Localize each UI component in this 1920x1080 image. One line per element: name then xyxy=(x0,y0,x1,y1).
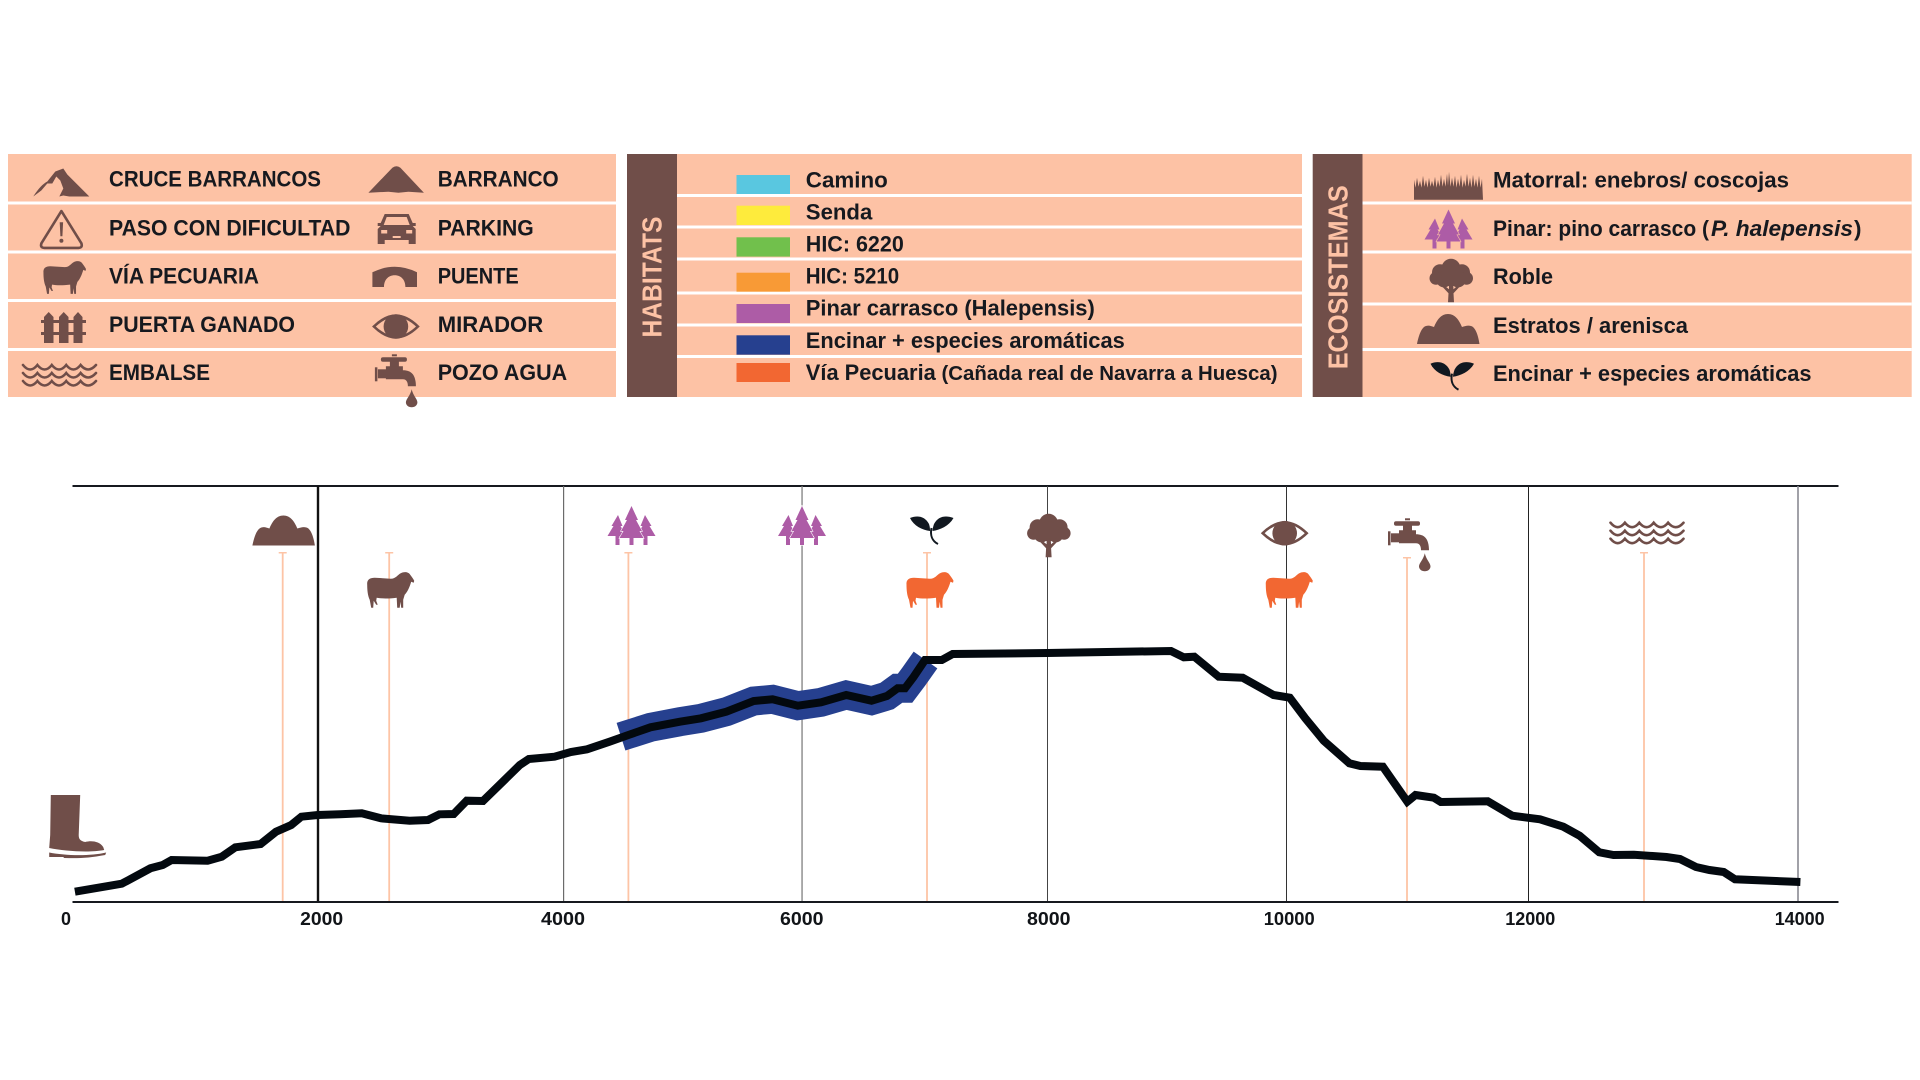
icon: strata hill xyxy=(1417,314,1480,344)
icon: barranco xyxy=(368,166,424,193)
icon: sprout marker xyxy=(910,516,954,544)
icon: oak tree xyxy=(1430,259,1473,302)
swatch: pinar carrasco xyxy=(736,304,790,323)
icon: warning triangle xyxy=(41,211,82,248)
swatch: via pecuaria xyxy=(736,363,790,382)
label: mirador: MIRADOR xyxy=(438,312,543,337)
x axis labels xyxy=(61,908,1825,929)
label: estratos: Estratos / arenisca xyxy=(1493,313,1688,338)
x axis labels: 6000 xyxy=(780,908,824,929)
label: cruce barrancos: CRUCE BARRANCOS xyxy=(109,167,321,192)
label: closing parenthesis: ) xyxy=(1854,216,1862,241)
icon: waves xyxy=(23,365,96,386)
habitats sidebar xyxy=(627,154,677,397)
elevation line xyxy=(75,651,1800,892)
icon: eye marker xyxy=(1263,521,1307,546)
panel: habitats legend xyxy=(627,154,1302,397)
x axis labels: 10000 xyxy=(1264,908,1315,929)
icon: cruce barrancos mountain xyxy=(33,168,89,196)
label: senda: Senda xyxy=(806,199,873,224)
label: encinar: Encinar + especies aromáticas xyxy=(806,328,1125,353)
x axis labels: 4000 xyxy=(541,908,585,929)
icon: orange sheep marker 1 xyxy=(906,572,954,608)
label: encinar: Encinar + especies aromáticas xyxy=(1493,361,1812,386)
label: canada real: (Cañada real de Navarra a Huesca) xyxy=(942,363,1278,385)
icon: orange sheep marker 2 xyxy=(1266,572,1313,608)
icon: strata hill marker xyxy=(252,516,315,546)
chart: elevation profile xyxy=(49,485,1839,929)
icon: matorral xyxy=(1414,172,1483,200)
swatch: hic 6220 xyxy=(736,237,790,257)
icon: tap marker xyxy=(1388,518,1430,571)
x axis labels: 2000 xyxy=(300,908,343,929)
swatch: camino xyxy=(736,175,790,194)
icon: car parking xyxy=(378,214,416,244)
swatch: senda xyxy=(736,206,790,225)
x axis labels: 14000 xyxy=(1775,908,1825,929)
icon: cattle gate xyxy=(41,312,86,343)
x axis labels: 0 xyxy=(61,908,71,929)
label: parking: PARKING xyxy=(438,216,534,241)
label: pozo agua: POZO AGUA xyxy=(438,360,567,385)
swatch: hic 5210 xyxy=(736,273,790,292)
label: hic 6220: HIC: 6220 xyxy=(806,232,904,257)
label: barranco: BARRANCO xyxy=(438,167,559,192)
icon: pines marker 2 xyxy=(778,506,826,545)
label: puente: PUENTE xyxy=(438,264,519,289)
icon: bridge xyxy=(372,267,417,287)
label: via pecuaria: Vía Pecuaria xyxy=(806,360,936,385)
x axis labels: 8000 xyxy=(1027,908,1070,929)
label: paso con dificultad: PASO CON DIFICULTAD xyxy=(109,216,350,241)
icon: pines marker 1 xyxy=(608,506,656,545)
highlighted encinar section xyxy=(621,660,926,737)
label: puerta ganado: PUERTA GANADO xyxy=(109,312,295,337)
icon: waves marker xyxy=(1610,523,1684,543)
heading: habitats: HABITATS xyxy=(636,217,668,338)
icon: boot xyxy=(49,795,106,858)
icon: eye xyxy=(374,314,418,339)
panel: map symbols legend xyxy=(8,154,616,397)
label: via pecuaria: VÍA PECUARIA xyxy=(109,264,259,289)
icon: oak marker xyxy=(1027,514,1071,557)
label: camino: Camino xyxy=(806,168,888,193)
heading: ecosistemas: ECOSISTEMAS xyxy=(1322,185,1354,369)
x axis labels: 12000 xyxy=(1505,908,1555,929)
icon: pines xyxy=(1424,210,1472,248)
swatch: encinar xyxy=(736,335,790,355)
label: pinar carrasco: Pinar carrasco (Halepensis) xyxy=(806,296,1095,321)
label: hic 5210: HIC: 5210 xyxy=(806,264,899,289)
label: embalse: EMBALSE xyxy=(109,360,210,385)
icon: sprout xyxy=(1430,362,1474,390)
label: p. halepensis: P. halepensis xyxy=(1711,216,1853,241)
icon: water tap with drop xyxy=(375,354,417,407)
label: roble: Roble xyxy=(1493,264,1553,289)
ecosistemas sidebar xyxy=(1313,154,1362,397)
icon: sheep xyxy=(43,261,86,294)
icon: sheep marker xyxy=(367,572,414,608)
panel: ecosistemas legend xyxy=(1313,154,1912,397)
label: matorral: Matorral: enebros/ coscojas xyxy=(1493,168,1789,192)
label: pinar: Pinar: pino carrasco ( xyxy=(1493,216,1709,241)
marker lines xyxy=(279,552,1648,902)
